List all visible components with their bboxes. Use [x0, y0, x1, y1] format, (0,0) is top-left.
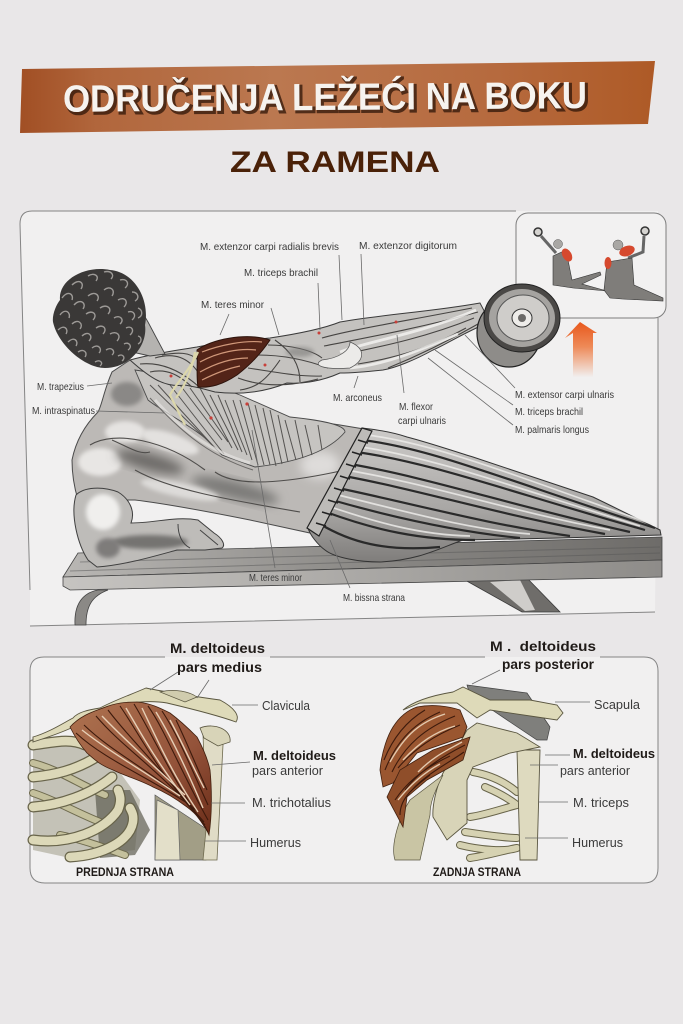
- labels: main: M. triceps brachil: [244, 267, 318, 279]
- back view shoulder: [380, 670, 590, 860]
- panel: main exercise illustration: [20, 211, 666, 626]
- raised arm: [130, 303, 490, 393]
- labels: shoulder views: M. deltoideus: [573, 746, 655, 761]
- labels: shoulder views: PREDNJA STRANA: [76, 867, 174, 879]
- scapula bone: [433, 723, 540, 840]
- front view shoulder: [33, 672, 258, 860]
- labels: main: M. extensor carpi ulnaris: [515, 389, 614, 401]
- deltoid muscle: [70, 702, 211, 835]
- labels: shoulder views: M. triceps: [573, 795, 629, 810]
- labels: shoulder views: Humerus: [250, 835, 301, 850]
- acromion: [403, 687, 563, 720]
- labels: main: M. intraspinatus: [32, 405, 95, 417]
- labels: main: carpi ulnaris: [398, 415, 446, 427]
- title banner: [20, 61, 655, 133]
- humerus: [517, 750, 540, 860]
- leader lines: [150, 672, 258, 841]
- labels: shoulder views: Clavicula: [262, 698, 311, 713]
- pants: [307, 428, 661, 562]
- leader lines: [472, 670, 590, 838]
- labels: main: M. palmaris longus: [515, 424, 589, 436]
- labels: shoulder views: M. trichotalius: [252, 795, 331, 810]
- labels: main: M. bissna strana: [343, 592, 405, 604]
- head and hair: [53, 269, 165, 368]
- labels: shoulder views: [76, 638, 655, 879]
- leader lines: [87, 254, 515, 588]
- labels: main: M. triceps brachil: [515, 406, 583, 418]
- labels: main: M. trapezius: [37, 381, 84, 393]
- labels: main: [32, 240, 614, 604]
- labels: shoulder views: M . deltoideus: [490, 638, 596, 654]
- labels: shoulder views: M. deltoideus: [253, 748, 336, 763]
- torso: [72, 360, 370, 533]
- ribs back: [33, 763, 125, 855]
- deltoid muscle: [380, 706, 470, 827]
- inset figure right: [604, 227, 663, 301]
- title banner: ODRUČENJA LEŽEĆI NA BOKU: [63, 72, 587, 121]
- labels: shoulder views: ZADNJA STRANA: [433, 867, 521, 879]
- scapula grey: [467, 685, 550, 740]
- highlighted deltoid muscle: [170, 337, 270, 425]
- panel: shoulder anatomy: [30, 638, 658, 883]
- labels: main: M. teres minor: [201, 299, 264, 311]
- labels: shoulder views: pars posterior: [502, 656, 595, 672]
- clavicle: [33, 688, 237, 742]
- labels: shoulder views: Scapula: [594, 697, 641, 712]
- subtitle: ZA RAMENA: [230, 146, 440, 179]
- labels: shoulder views: pars anterior: [252, 763, 324, 778]
- ribs front: [33, 741, 133, 857]
- dumbbell: [477, 284, 560, 367]
- bench legs: [75, 576, 560, 625]
- labels: shoulder views: M. deltoideus: [170, 640, 265, 656]
- labels: main: M. extenzor carpi radialis brevis: [200, 241, 339, 253]
- supporting arm: [74, 488, 224, 567]
- back muscles striped: [135, 370, 345, 470]
- labels: shoulder views: pars anterior: [560, 763, 631, 778]
- arm bones: [155, 795, 208, 860]
- inset figure left: [534, 228, 607, 291]
- labels: main: M. teres minor: [249, 572, 302, 584]
- labels: shoulder views: Humerus: [572, 835, 623, 850]
- bench: [63, 537, 662, 590]
- ribs: [460, 772, 517, 858]
- labels: main: M. extenzor digitorum: [359, 240, 457, 252]
- inset: exercise sequence: [516, 213, 666, 318]
- labels: shoulder views: pars medius: [177, 659, 262, 675]
- arrow up: [565, 322, 597, 377]
- ribcage shadow: [33, 745, 140, 858]
- labels: main: M. flexor: [399, 401, 433, 413]
- title banner: ODRUČENJA LEŽEĆI NA BOKU: [65, 74, 589, 123]
- labels: main: M. arconeus: [333, 392, 382, 404]
